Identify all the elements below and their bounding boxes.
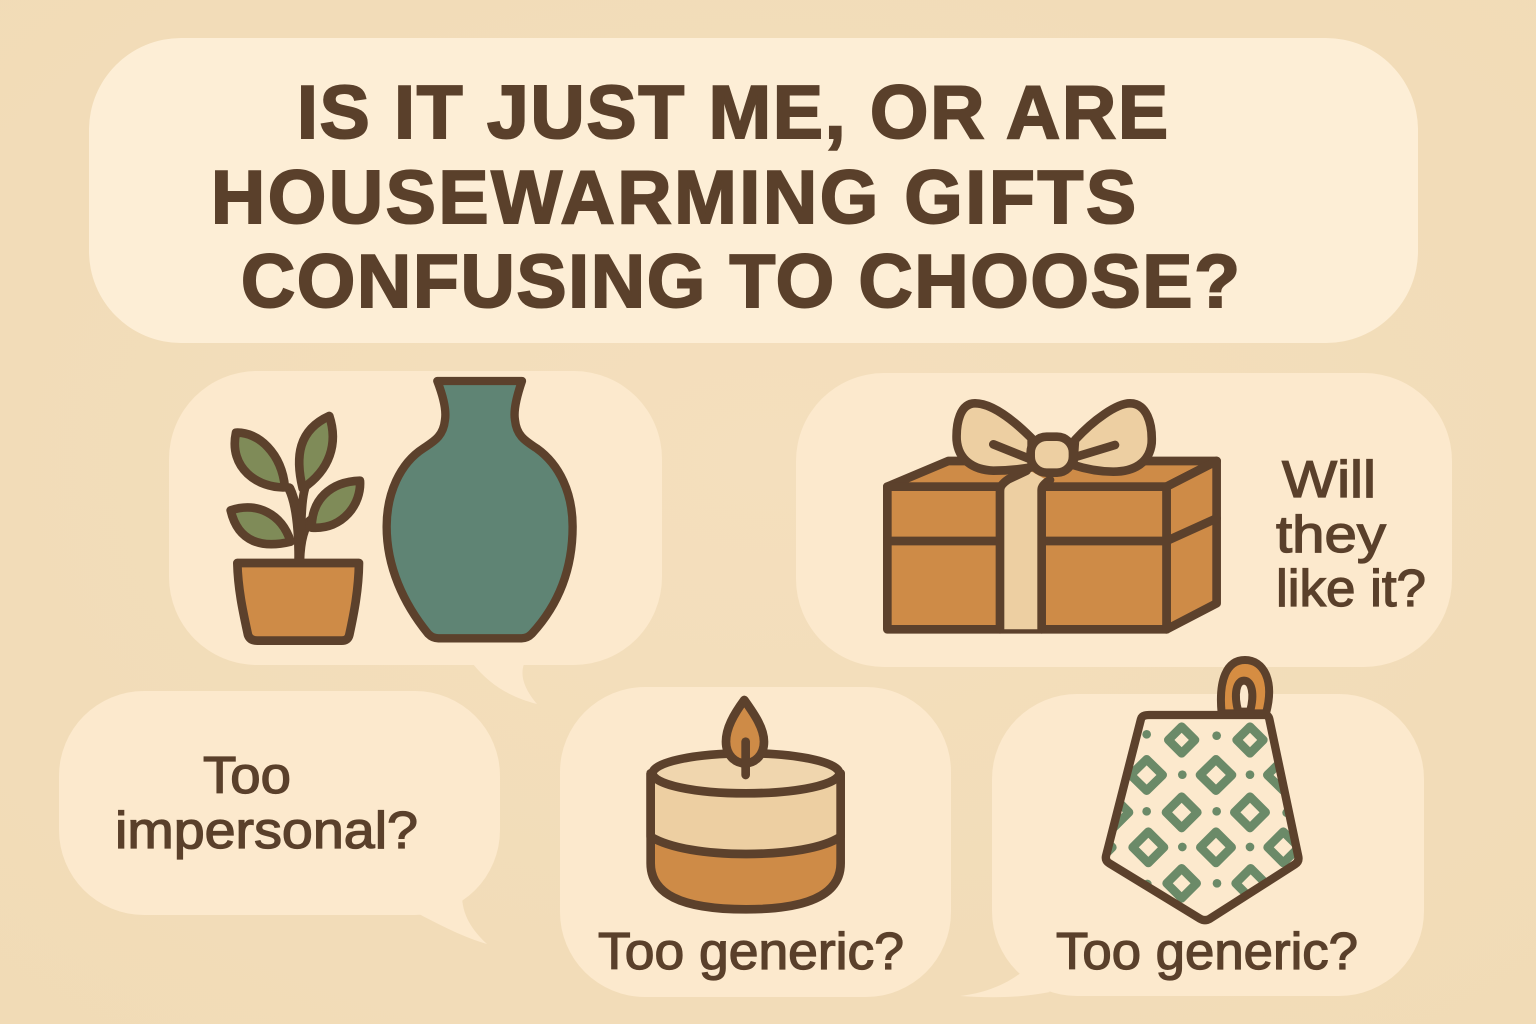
label: too impersonal: impersonal? <box>115 802 418 860</box>
icon: candle <box>651 700 841 909</box>
title heading <box>211 70 1240 323</box>
label: will they like it: like it? <box>1276 560 1426 618</box>
title heading: IS IT JUST ME, OR ARE <box>297 70 1168 154</box>
label: too generic: Too generic? <box>1056 923 1358 981</box>
speech bubble: pot holder <box>960 660 1424 997</box>
icon: potted plant <box>231 416 360 641</box>
speech bubble: gift box <box>796 373 1452 667</box>
label: will they like it: Will <box>1282 451 1376 509</box>
label: too impersonal: Too <box>203 747 291 805</box>
label: too generic: Too generic? <box>598 923 904 981</box>
title panel <box>89 38 1418 343</box>
pattern <box>1110 722 1294 903</box>
speech bubble: too impersonal <box>59 691 500 944</box>
label: too impersonal <box>115 747 418 860</box>
label: will they like it <box>1276 451 1426 618</box>
speech bubble: plant and vase <box>169 371 662 704</box>
title heading: HOUSEWARMING GIFTS <box>211 155 1136 239</box>
icon: pot holder <box>1081 660 1299 920</box>
label: will they like it: they <box>1276 506 1386 564</box>
speech bubble: candle <box>560 687 951 997</box>
title heading: CONFUSING TO CHOOSE? <box>241 239 1240 323</box>
hanging loop <box>1221 660 1269 713</box>
icon: vase <box>387 381 573 638</box>
icon: gift box <box>887 403 1217 629</box>
